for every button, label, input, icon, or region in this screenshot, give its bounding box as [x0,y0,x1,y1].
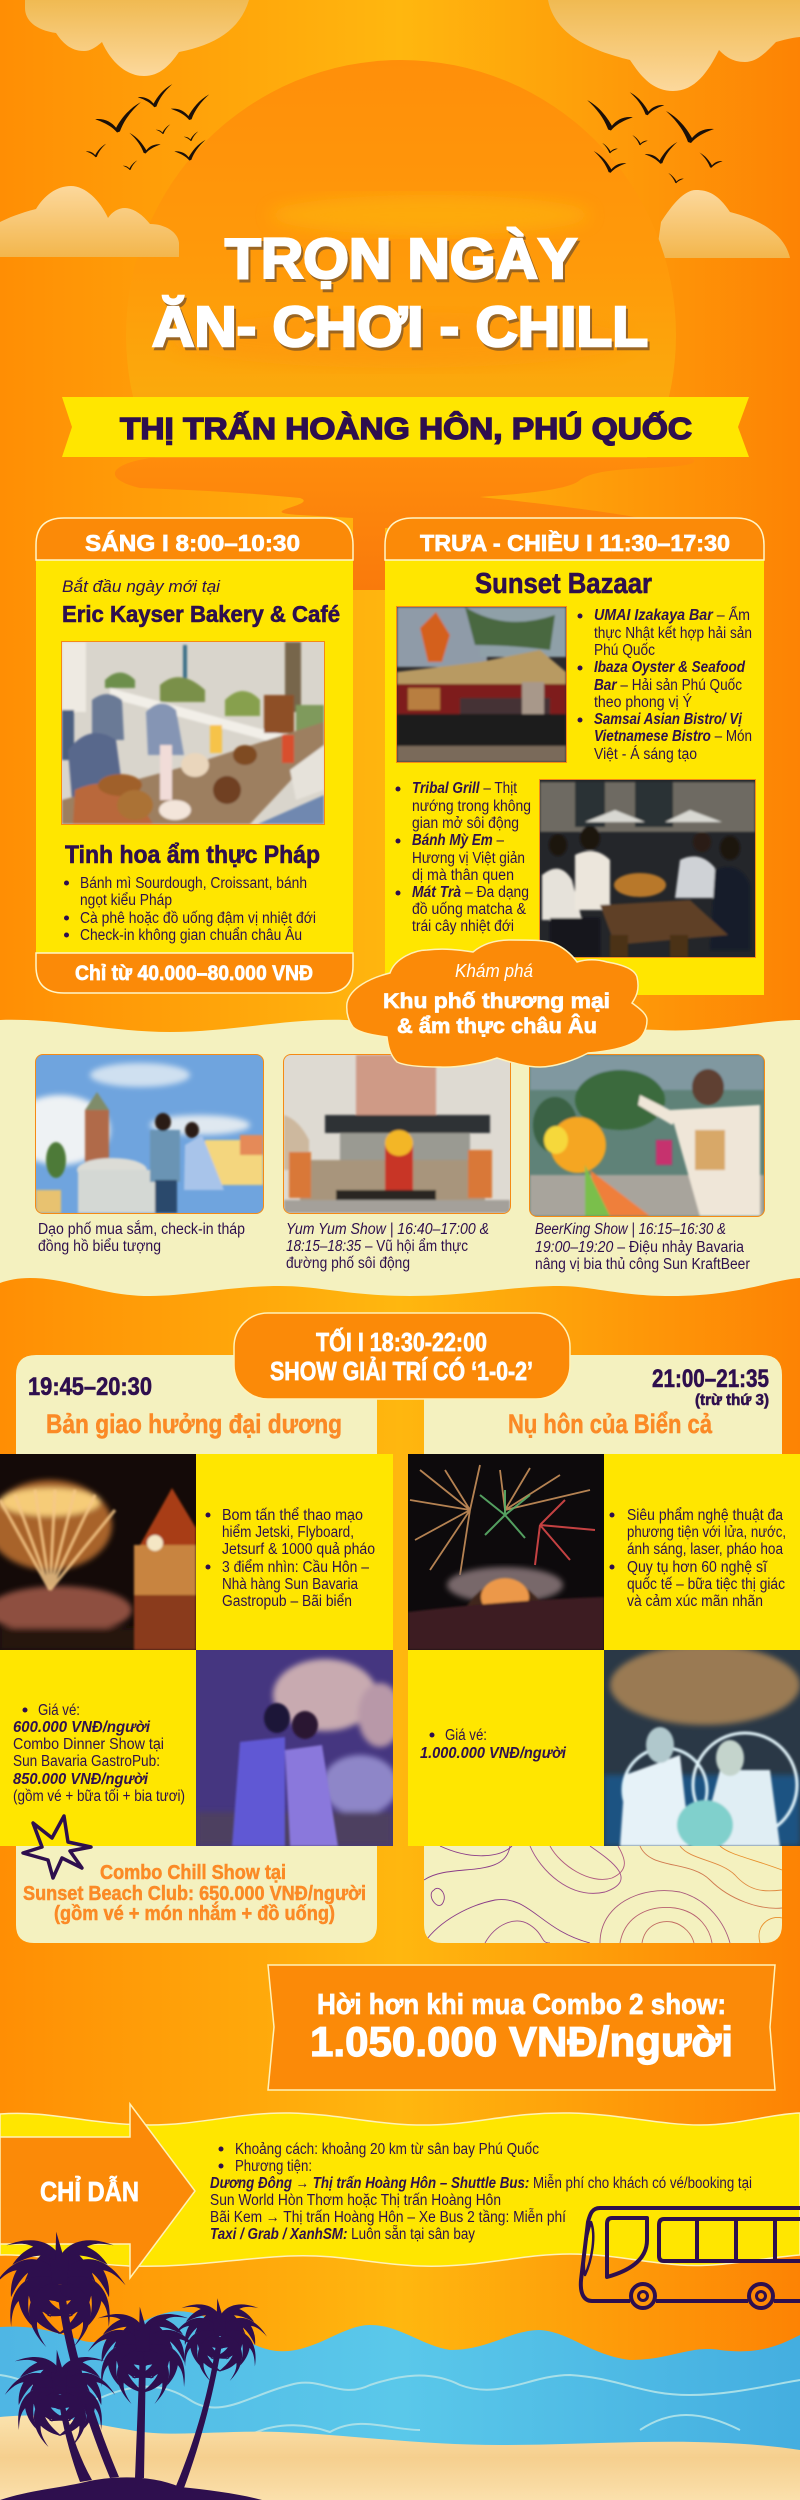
captions under photos: nâng vị bia thủ công Sun KraftBeer [535,1256,750,1273]
birds: left flock [86,84,209,170]
list: Sunset Bazaar venues: Vietnamese Bistro – Món [594,728,752,745]
list: Sunset Bazaar venues: theo phong vị Ý [594,694,692,711]
callout cloud: explore [347,940,647,1067]
list: Sunset Bazaar venues: Samsai Asian Bistro/ Vị [594,711,743,728]
panel: combo chill: Combo Chill Show tại [100,1862,286,1884]
list: Tribal Grill and others: Bánh Mỳ Em – [412,832,504,849]
morning bullet list: Cà phê hoặc đồ uống đậm vị nhiệt đới [80,910,316,927]
palm trees [0,2223,268,2500]
photo: performers with light hoops [604,1645,800,1850]
list: Tribal Grill and others: Mát Trà – Đa dạng [412,884,529,901]
text: show 1 features: hiểm Jetski, Flyboard, [222,1524,354,1541]
morning subheading: Tinh hoa ẩm thực Pháp [65,841,320,869]
panel: evening left header: Bản giao hưởng đại dương [46,1409,342,1439]
title [152,227,648,359]
afternoon header [385,518,764,560]
text: show 2 features [604,1454,800,1650]
text: show 2 ticket price: 1.000.000 VNĐ/người [420,1745,567,1762]
morning venue: Eric Kayser Bakery & Café [62,601,340,627]
text: show 2 features: Quy tụ hơn 60 nghệ sĩ [627,1559,768,1576]
photo: fireworks and clock tower [0,1454,196,1650]
evening time pill: TỐI I 18:30-22:00 [316,1327,487,1357]
list: Tribal Grill and others: nướng trong không [412,798,531,815]
list: Sunset Bazaar venues: Phú Quốc [594,642,655,659]
sun reflection [115,458,694,590]
text: directions: Dương Đông → Thị trấn Hoàng Hôn – Shuttle Bus: Miễn phí cho khách có vé/booking tại [210,2175,752,2192]
directions arrow [0,2104,195,2278]
promo box: combo two shows: Hời hơn khi mua Combo 2 show: [317,1989,726,2021]
list: Tribal Grill and others: Tribal Grill – Thịt [412,780,518,797]
photo: fireworks over stage [408,1454,604,1650]
captions under photos: BeerKing Show | 16:15–16:30 & [535,1221,726,1238]
photo: couple under fireworks [196,1650,402,1846]
text: show 1 ticket prices: 600.000 VNĐ/người [13,1719,151,1736]
captions under photos: 19:00–19:20 – Điệu nhảy Bavaria [535,1239,744,1256]
title: TRỌN NGÀY [225,227,577,291]
text: show 2 features: Siêu phẩm nghệ thuật đa [627,1507,783,1524]
panel: evening right header [424,1355,782,1454]
text: directions: Taxi / Grab / XanhSM: Luôn sẵn tại sân bay [210,2226,475,2243]
directions arrow: CHỈ DẪN [40,2175,139,2207]
cloud: right middle [656,190,790,258]
cloud: top left [25,0,249,76]
text: show 1 features: Jetsurf & 1000 quả pháo [222,1541,375,1558]
bus icon [581,2208,800,2308]
list: Tribal Grill and others: dị mà thân quen [412,867,514,884]
cloud: left middle [0,186,179,257]
list: Tribal Grill and others: Hương vị Việt giản [412,850,525,867]
text: show 1 ticket prices: 850.000 VNĐ/người [13,1771,149,1788]
list: Tribal Grill and others: đồ uống matcha & [412,901,527,918]
birds: right flock [587,92,723,183]
callout cloud: explore: Khám phá [455,961,533,981]
text: show 1 features: Bom tấn thể thao mạo [222,1507,363,1524]
panel: combo chill: (gồm vé + món nhắm + đồ uống) [54,1901,335,1925]
text: show 1 ticket prices: Combo Dinner Show tại [13,1736,164,1753]
yellow wave band [0,2113,800,2266]
captions under photos: đồng hồ biểu tượng [38,1238,161,1255]
morning bullet list: ngọt kiểu Pháp [80,892,172,909]
panel: morning [36,518,353,993]
text: show 1 features [196,1454,393,1650]
afternoon heading: Sunset Bazaar [475,568,652,600]
list: Sunset Bazaar venues: UMAI Izakaya Bar – Ẩm [594,606,750,624]
list: Tribal Grill and others [396,780,531,935]
callout cloud: explore: Khu phố thương mại [383,990,610,1013]
sea [0,2311,800,2460]
captions under photos: Dạo phố mua sắm, check-in tháp [38,1221,245,1238]
morning price footer: Chỉ từ 40.000–80.000 VNĐ [75,962,313,985]
evening time pill [234,1313,570,1399]
panel: combo chill [16,1846,377,1943]
list: Tribal Grill and others: trái cây nhiệt đới [412,918,514,935]
text: show 2 features: và cảm xúc mãn nhãn [627,1593,763,1610]
panel: evening left header [16,1355,377,1454]
list: Sunset Bazaar venues: Bar – Hải sản Phú Quốc [594,677,742,694]
text: show 1 features: Nhà hàng Sun Bavaria [222,1576,358,1593]
morning header: SÁNG I 8:00–10:30 [85,529,300,556]
photo: Tribal Grill [396,606,567,763]
palm crowns [0,2223,268,2451]
banner: location [62,397,749,457]
title: ĂN- CHƠI - CHILL [152,295,648,359]
morning bullet list: Bánh mì Sourdough, Croissant, bánh [80,875,307,892]
captions under photos: 18:15–18:35 – Vũ hội ẩm thực [286,1238,468,1255]
list: Sunset Bazaar venues: Việt - Á sáng tạo [594,746,697,763]
banner: location: THỊ TRẤN HOÀNG HÔN, PHÚ QUỐC [120,410,692,446]
text: show 1 ticket prices [0,1650,196,1846]
afternoon header: TRƯA - CHIỀU I 11:30–17:30 [420,529,730,556]
sun [126,60,676,458]
list: Sunset Bazaar venues: Ibaza Oyster & Seafood [594,659,745,676]
morning header [36,518,353,560]
evening time pill: SHOW GIẢI TRÍ CÓ ‘1-0-2’ [270,1356,533,1386]
list: Tribal Grill and others: gian mở sôi động [412,815,519,832]
text: directions: Khoảng cách: khoảng 20 km từ sân bay Phú Quốc [235,2141,539,2158]
sand [0,2415,800,2500]
text: show 2 features: quốc tế – bữa tiệc thị giác [627,1576,785,1593]
captions under photos: Yum Yum Show | 16:40–17:00 & [286,1221,489,1238]
promo box: combo two shows: 1.050.000 VNĐ/người [310,2018,733,2065]
panel: topographic pattern [424,1846,782,1943]
morning intro: Bắt đầu ngày mới tại [62,577,221,596]
text: directions: Phương tiện: [235,2158,312,2175]
text: show 2 ticket price [408,1650,604,1846]
captions under photos: đường phố sôi động [286,1255,410,1272]
text: show 1 features: 3 điểm nhìn: Cầu Hôn – [222,1559,369,1576]
cream band [0,1020,800,1296]
photo: BeerKing show [529,1054,765,1217]
morning bullet list [64,875,316,944]
photo: friends dining [539,779,756,958]
text: directions [210,2141,752,2243]
palm trunks and island [0,2285,262,2500]
text: show 1 ticket prices: Sun Bavaria GastroPub: [13,1753,160,1770]
callout cloud: explore: & ẩm thực châu Âu [397,1014,597,1038]
text: show 2 ticket price: Giá vé: [445,1727,487,1744]
text: show 1 features: Gastropub – Bãi biển [222,1593,352,1610]
captions under photos [38,1221,750,1273]
morning bullet list: Check-in không gian chuẩn châu Âu [80,927,302,944]
panel: afternoon [385,518,764,995]
text: directions: Bãi Kem → Thị trấn Hoàng Hôn – Xe Bus 2 tầng: Miễn phí [210,2209,567,2226]
panel: combo chill: Sunset Beach Club: 650.000 VNĐ/người [23,1883,366,1905]
morning price footer [36,953,353,993]
panel: evening right header: (trừ thứ 3) [695,1392,769,1409]
text: directions: Sun World Hòn Thơm hoặc Thị trấn Hoàng Hôn [210,2192,501,2209]
photo: Yum Yum show [283,1054,511,1214]
promo box: combo two shows [268,1965,775,2090]
photo: bakery table [61,641,325,825]
icon: star [23,1816,91,1878]
photo: fountain and clock tower [10,1054,264,1214]
panel: evening right header: 21:00–21:35 [652,1365,769,1393]
text: show 1 ticket prices: Giá vé: [38,1702,80,1719]
panel: evening right header: Nụ hôn của Biển cả [508,1409,713,1439]
text: show 1 ticket prices: (gồm vé + bữa tối + bia tươi) [13,1788,185,1805]
list: Sunset Bazaar venues: thực Nhật kết hợp hải sản [594,625,752,642]
cloud: top right [548,0,800,91]
list: Sunset Bazaar venues [578,606,752,763]
panel: evening left header: 19:45–20:30 [28,1373,152,1401]
